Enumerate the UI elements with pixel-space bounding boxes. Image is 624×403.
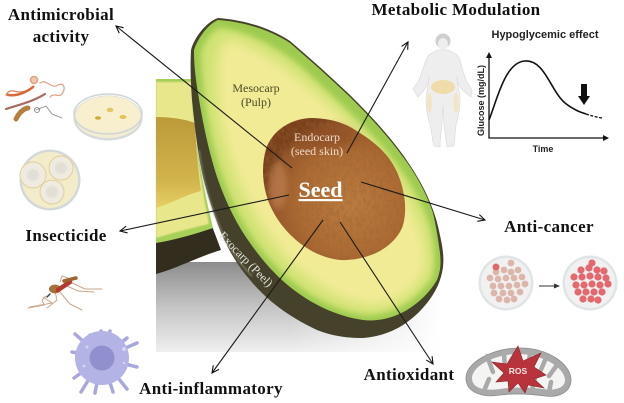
- heading: antimicrobial activity: activity: [33, 27, 89, 46]
- label: exocarp: Exocarp (Peel): [216, 229, 276, 290]
- arrow: metabolic: [347, 42, 408, 153]
- x axis label: Time: [533, 144, 553, 154]
- icon: mitochondrion with ROS burst: [466, 346, 571, 396]
- axes: [489, 54, 606, 138]
- heading: metabolic modulation: Metabolic Modulation: [372, 0, 541, 19]
- icon: cell culture after: [562, 256, 618, 310]
- label: seed: Seed: [298, 177, 342, 202]
- heading: antimicrobial activity: Antimicrobial: [8, 5, 114, 24]
- front avocado half: peel: [191, 18, 443, 338]
- icon: petri dish with colonies: [74, 94, 142, 140]
- arrows: [116, 26, 485, 373]
- icon: immune cell: [72, 331, 137, 393]
- arrow: anti-inflammatory: [212, 220, 323, 373]
- label: mesocarp: (Pulp): [241, 95, 271, 109]
- ROS label: ROS: [509, 366, 528, 376]
- chart: hypoglycemic effect: [476, 29, 609, 154]
- flesh: [185, 15, 450, 325]
- arrow: antimicrobial: [116, 26, 292, 168]
- arrow between cell cultures: [539, 284, 560, 288]
- arrow: insecticide: [120, 195, 289, 231]
- glucose curve: [489, 61, 586, 120]
- y axis label: Glucose (mg/dL): [476, 65, 486, 136]
- icon: petri dish with fungal colonies: [20, 150, 80, 210]
- floor shadow: [156, 262, 441, 352]
- arrow: antioxidant: [340, 222, 433, 364]
- icon: microbes: [6, 76, 64, 119]
- icon: mosquito: [28, 276, 102, 310]
- heading: anti-cancer: Anti-cancer: [504, 217, 594, 236]
- seed: [263, 118, 405, 260]
- heading: anti-inflammatory: Anti-inflammatory: [139, 379, 283, 398]
- label: endocarp: Endocarp: [294, 130, 340, 144]
- chart title: Hypoglycemic effect: [492, 29, 599, 41]
- heading: insecticide: Insecticide: [25, 226, 107, 245]
- peel highlight: [199, 150, 252, 276]
- heading: antioxidant: Antioxidant: [364, 365, 454, 384]
- down arrow: [578, 84, 590, 105]
- label: endocarp: (seed skin): [291, 144, 343, 158]
- back avocado half: [156, 79, 221, 274]
- label: mesocarp: Mesocarp: [232, 81, 280, 95]
- arrow: anti-cancer: [361, 182, 485, 220]
- avocado photograph: [156, 15, 450, 352]
- icon: cell culture before: [478, 256, 534, 310]
- icon: human body with fat deposits: [413, 34, 472, 147]
